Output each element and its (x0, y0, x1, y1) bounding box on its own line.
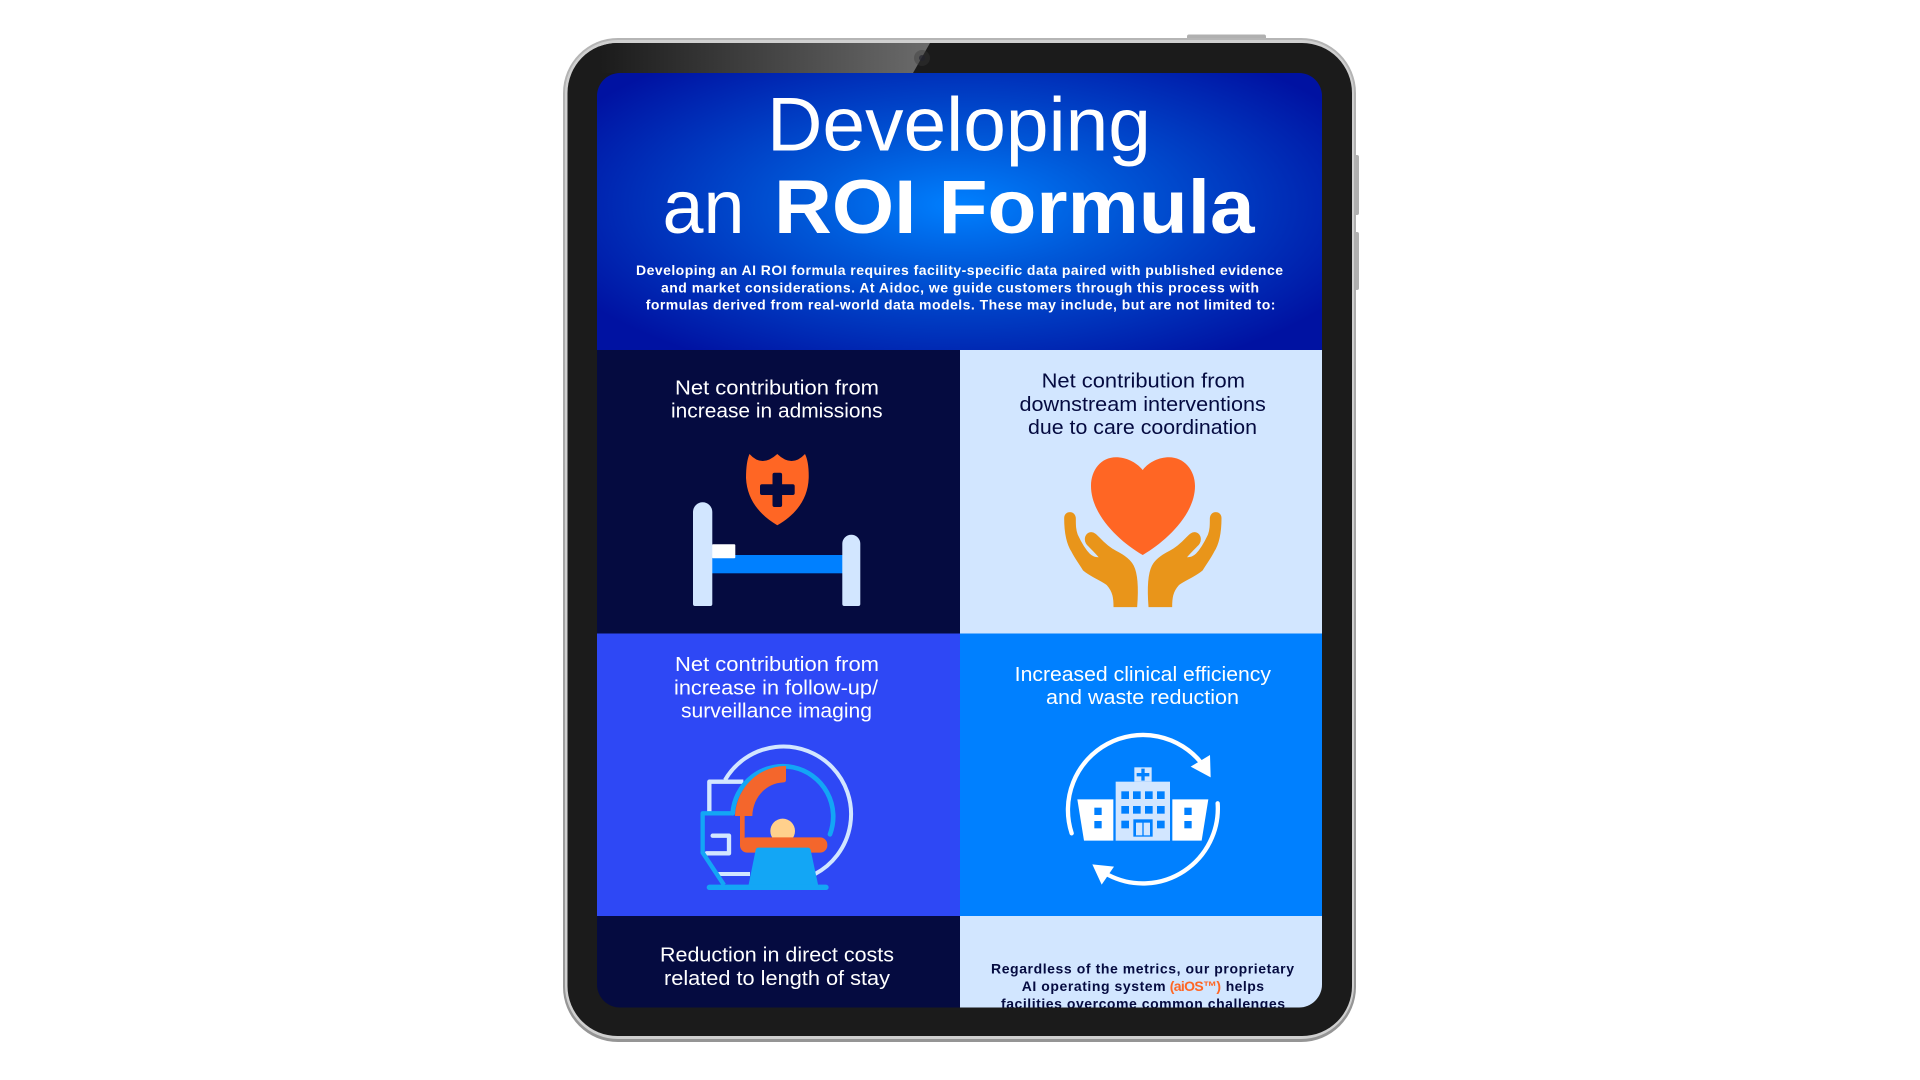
panel: header (597, 73, 1322, 350)
closing text: facilities overcome common challenges (1001, 996, 1285, 1012)
camera (914, 50, 930, 66)
title: an (662, 165, 744, 250)
metal edge (563, 38, 1356, 1042)
panel: clinical efficiency (960, 634, 1322, 916)
heading: surveillance imaging (674, 654, 879, 723)
heading: admissions: Net contribution from (675, 377, 879, 399)
heading: surveillance imaging: Net contribution from (675, 654, 879, 676)
icon: heart in hands (1065, 457, 1221, 607)
heading: direct costs: Reduction in direct costs (660, 944, 894, 966)
heading: admissions: increase in admissions (671, 401, 883, 423)
bezel (568, 43, 1352, 1036)
intro paragraph (636, 262, 1283, 312)
panel: increase in admissions (597, 350, 960, 634)
heading: waste reduction: and waste reduction (1046, 687, 1239, 709)
heading: direct costs: related to length of stay (664, 968, 890, 990)
title: Developing (767, 83, 1151, 168)
heading: care coordination (1020, 372, 1265, 434)
tablet screen (597, 73, 1322, 1012)
closing text (992, 964, 1294, 1008)
side volume up button (1353, 155, 1359, 215)
heading: care coordination: downstream interventions (1020, 394, 1266, 416)
intro paragraph: formulas derived from real-world data models. These may include, but are not limited to: (646, 296, 1275, 312)
heading: care coordination: Net contribution from (1042, 371, 1245, 393)
panel: follow-up imaging (597, 634, 960, 916)
heading: care coordination: due to care coordination (1028, 417, 1257, 439)
icon: hospital with cycle arrows (1068, 735, 1218, 885)
heading: waste reduction (1016, 666, 1271, 704)
icon: MRI scanner (703, 746, 851, 887)
heading: direct costs (660, 944, 894, 990)
title: ROI Formula (774, 165, 1255, 250)
tablet device frame (563, 34, 1359, 1042)
side volume down button (1353, 232, 1359, 290)
heading: admissions (672, 380, 882, 418)
panel: aiOS closing note (960, 916, 1322, 1012)
bezel glare (567, 43, 930, 73)
closing text: helps (1226, 978, 1264, 994)
top power button (1187, 34, 1266, 40)
panel: downstream interventions (960, 350, 1322, 634)
intro paragraph: and market considerations. At Aidoc, we guide customers through this process with (661, 279, 1259, 295)
closing text: Regardless of the metrics, our proprietary (991, 960, 1294, 976)
title (666, 96, 1256, 234)
heading: surveillance imaging: surveillance imaging (681, 701, 872, 723)
heading: waste reduction: Increased clinical efficiency (1015, 664, 1271, 686)
heading: surveillance imaging: increase in follow-up/ (674, 677, 878, 699)
icon: hospital bed and shield (693, 454, 860, 606)
closing text: (aiOS™) (1170, 978, 1221, 994)
intro paragraph: Developing an AI ROI formula requires facility-specific data paired with published evidence (636, 262, 1283, 278)
closing text: AI operating system (1022, 978, 1166, 994)
panel: length of stay (597, 916, 960, 1011)
